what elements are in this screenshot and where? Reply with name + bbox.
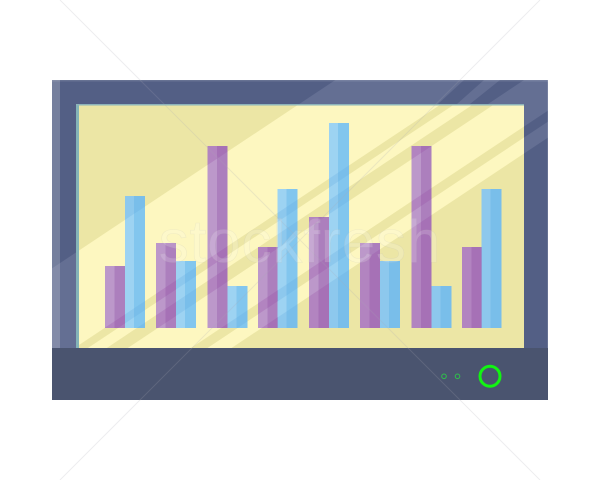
bar group 3 <box>208 146 248 328</box>
bar group 5 <box>309 123 349 328</box>
bar group 7 <box>412 146 452 328</box>
screen top edge <box>76 104 524 106</box>
watermark diagonal lines <box>60 0 540 480</box>
watermark text: stockfresh <box>159 208 441 275</box>
indicator light 2 <box>455 374 460 379</box>
glare tint on blue bars <box>125 166 502 328</box>
power button <box>480 366 500 386</box>
bar group 2 <box>156 243 196 328</box>
bar chart <box>105 123 502 328</box>
bar group 1 <box>105 196 145 328</box>
bar group 6 <box>360 243 400 328</box>
bar group 4 <box>258 189 298 328</box>
indicator light 1 <box>442 374 446 379</box>
glare tint on purple bars <box>105 146 482 328</box>
screen left edge <box>76 104 79 348</box>
monitor frame <box>52 80 548 348</box>
screen glare shading <box>79 106 524 348</box>
screen <box>76 104 524 348</box>
monitor base panel <box>52 348 548 400</box>
bar group 8 <box>462 189 502 328</box>
